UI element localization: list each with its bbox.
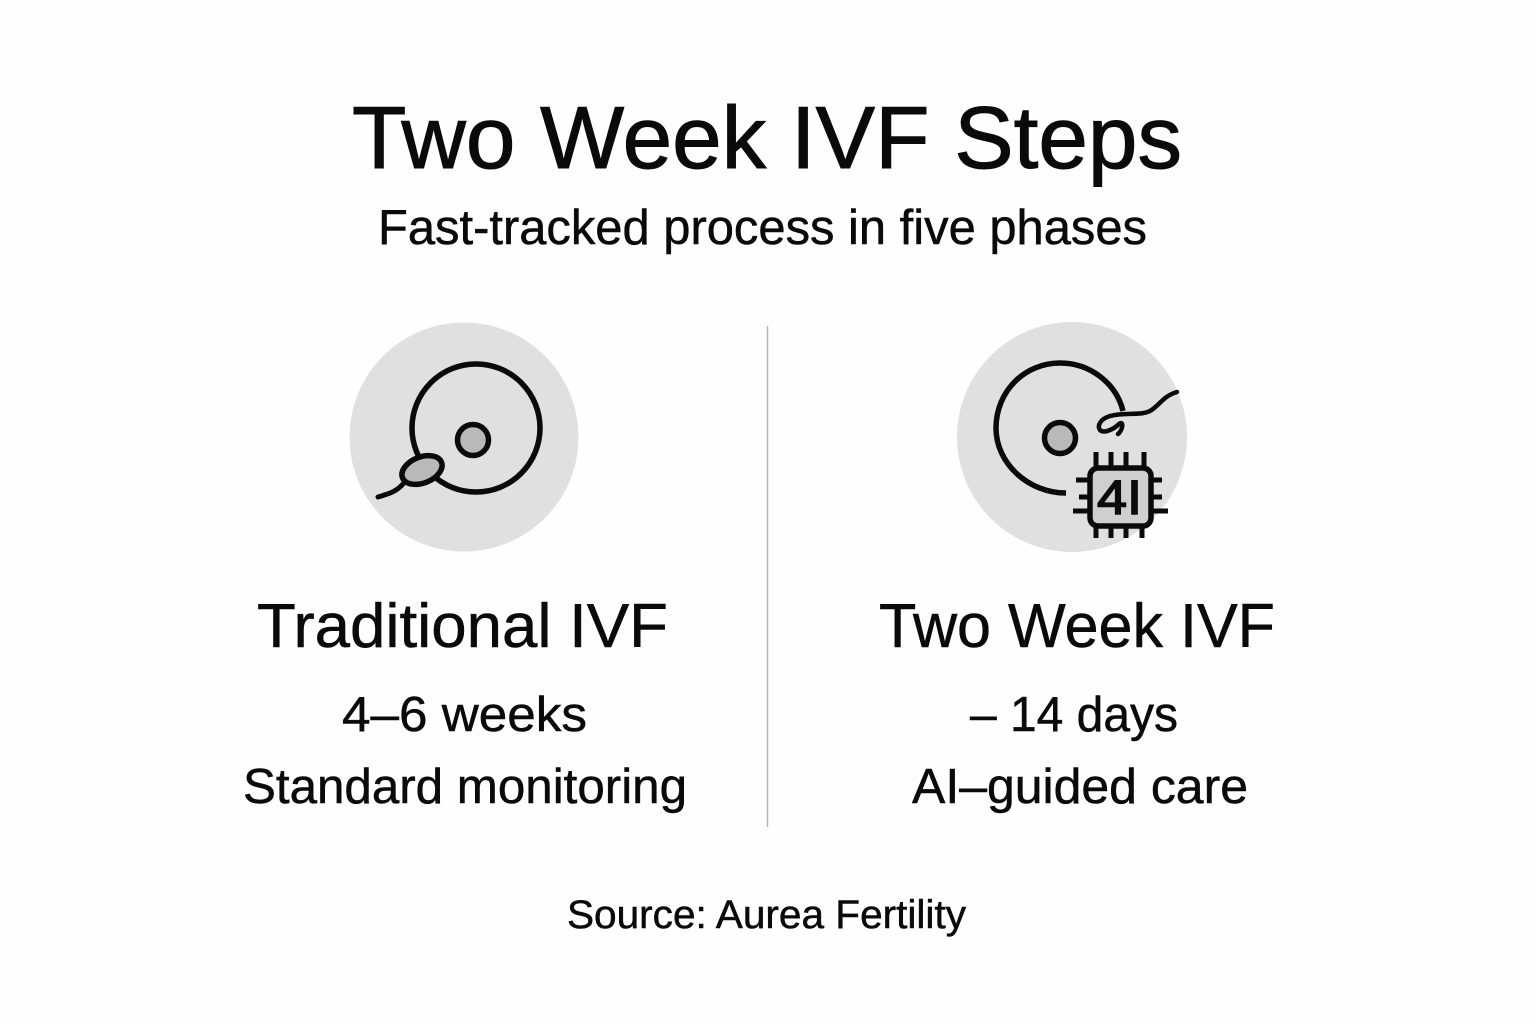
icon: egg, sperm and AI chip [957,322,1187,552]
subtitle: Fast-tracked process in five phases [378,201,1147,255]
panel: two week IVF [879,322,1275,814]
center divider [766,326,768,827]
heading: traditional IVF: Traditional IVF [257,592,668,661]
source note: Source: Aurea Fertility [567,893,966,937]
care: traditional: Standard monitoring [243,760,687,814]
icon: chip [1073,452,1168,538]
panel: traditional IVF [243,322,687,814]
care: two week: AI–guided care [912,760,1248,814]
heading: two week IVF: Two Week IVF [879,592,1275,661]
title: Two Week IVF Steps [352,88,1182,187]
icon: egg and sperm [350,322,578,552]
duration: two week: – 14 days [970,688,1178,742]
icon: sperm tail [1099,392,1177,434]
chip label: 4I [1097,472,1142,525]
duration: traditional: 4–6 weeks [342,688,587,742]
